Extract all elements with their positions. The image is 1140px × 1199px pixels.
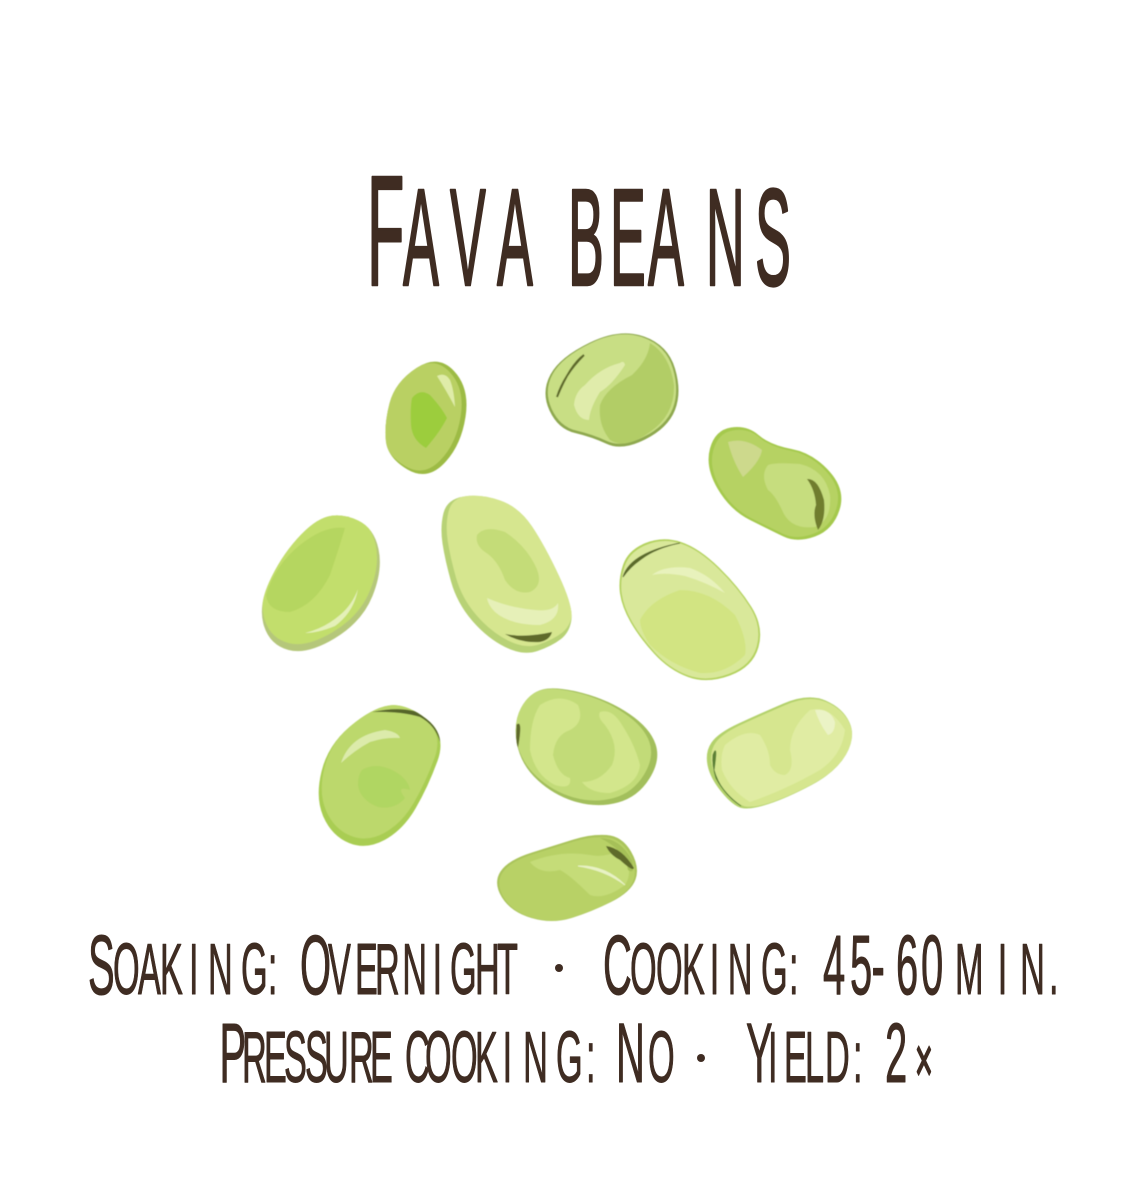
bean: top centre round xyxy=(545,333,678,447)
illustration: scattered fava beans xyxy=(262,333,852,921)
info line 2: yield xyxy=(746,1005,933,1100)
bean: centre large xyxy=(441,495,572,653)
title: AVA BEANS xyxy=(403,161,791,315)
info line 1: soaking: S xyxy=(88,917,115,1012)
info line 2: pressure cooking: N xyxy=(616,1005,645,1100)
bean: centre right xyxy=(619,539,760,680)
info line 2: yield: 2 xyxy=(885,1005,907,1100)
info line 2: pressure cooking: RESSURE COOKING: xyxy=(242,1017,609,1097)
info line 2: pressure cooking xyxy=(219,1005,675,1100)
info line 1: cooking time: 45-60 xyxy=(823,917,943,1012)
bean: top right xyxy=(709,427,841,540)
bean: left xyxy=(262,512,380,651)
info line 1: cooking time: OOKING: xyxy=(630,929,809,1009)
info line 1: soaking: O xyxy=(300,917,331,1012)
info line 1: cooking time: C xyxy=(603,917,632,1012)
info line 1: soaking xyxy=(88,917,518,1012)
bean: bottom xyxy=(497,835,637,921)
title: F xyxy=(367,144,404,319)
info line 1: soaking: VERNIGHT xyxy=(328,929,518,1009)
info line 2: yield: IELD: xyxy=(768,1017,874,1097)
info separator dot xyxy=(555,964,563,972)
info line 1: cooking time: MIN. xyxy=(945,929,1059,1009)
bean: lower centre xyxy=(516,688,657,805)
info line 2: pressure cooking: O xyxy=(648,1017,675,1097)
infographic canvas xyxy=(90,176,1056,1083)
bean: lower left xyxy=(319,705,441,846)
info separator dot xyxy=(697,1054,705,1062)
info line 2: yield: Y xyxy=(746,1005,773,1100)
info line 1: soaking: OAKING: xyxy=(113,929,290,1009)
info line 2: pressure cooking: P xyxy=(219,1005,246,1100)
bean: lower right xyxy=(707,697,852,808)
bean: top left small xyxy=(384,362,466,474)
info line 1: cooking time xyxy=(603,917,1059,1012)
info line 2: yield: × xyxy=(915,1025,933,1096)
